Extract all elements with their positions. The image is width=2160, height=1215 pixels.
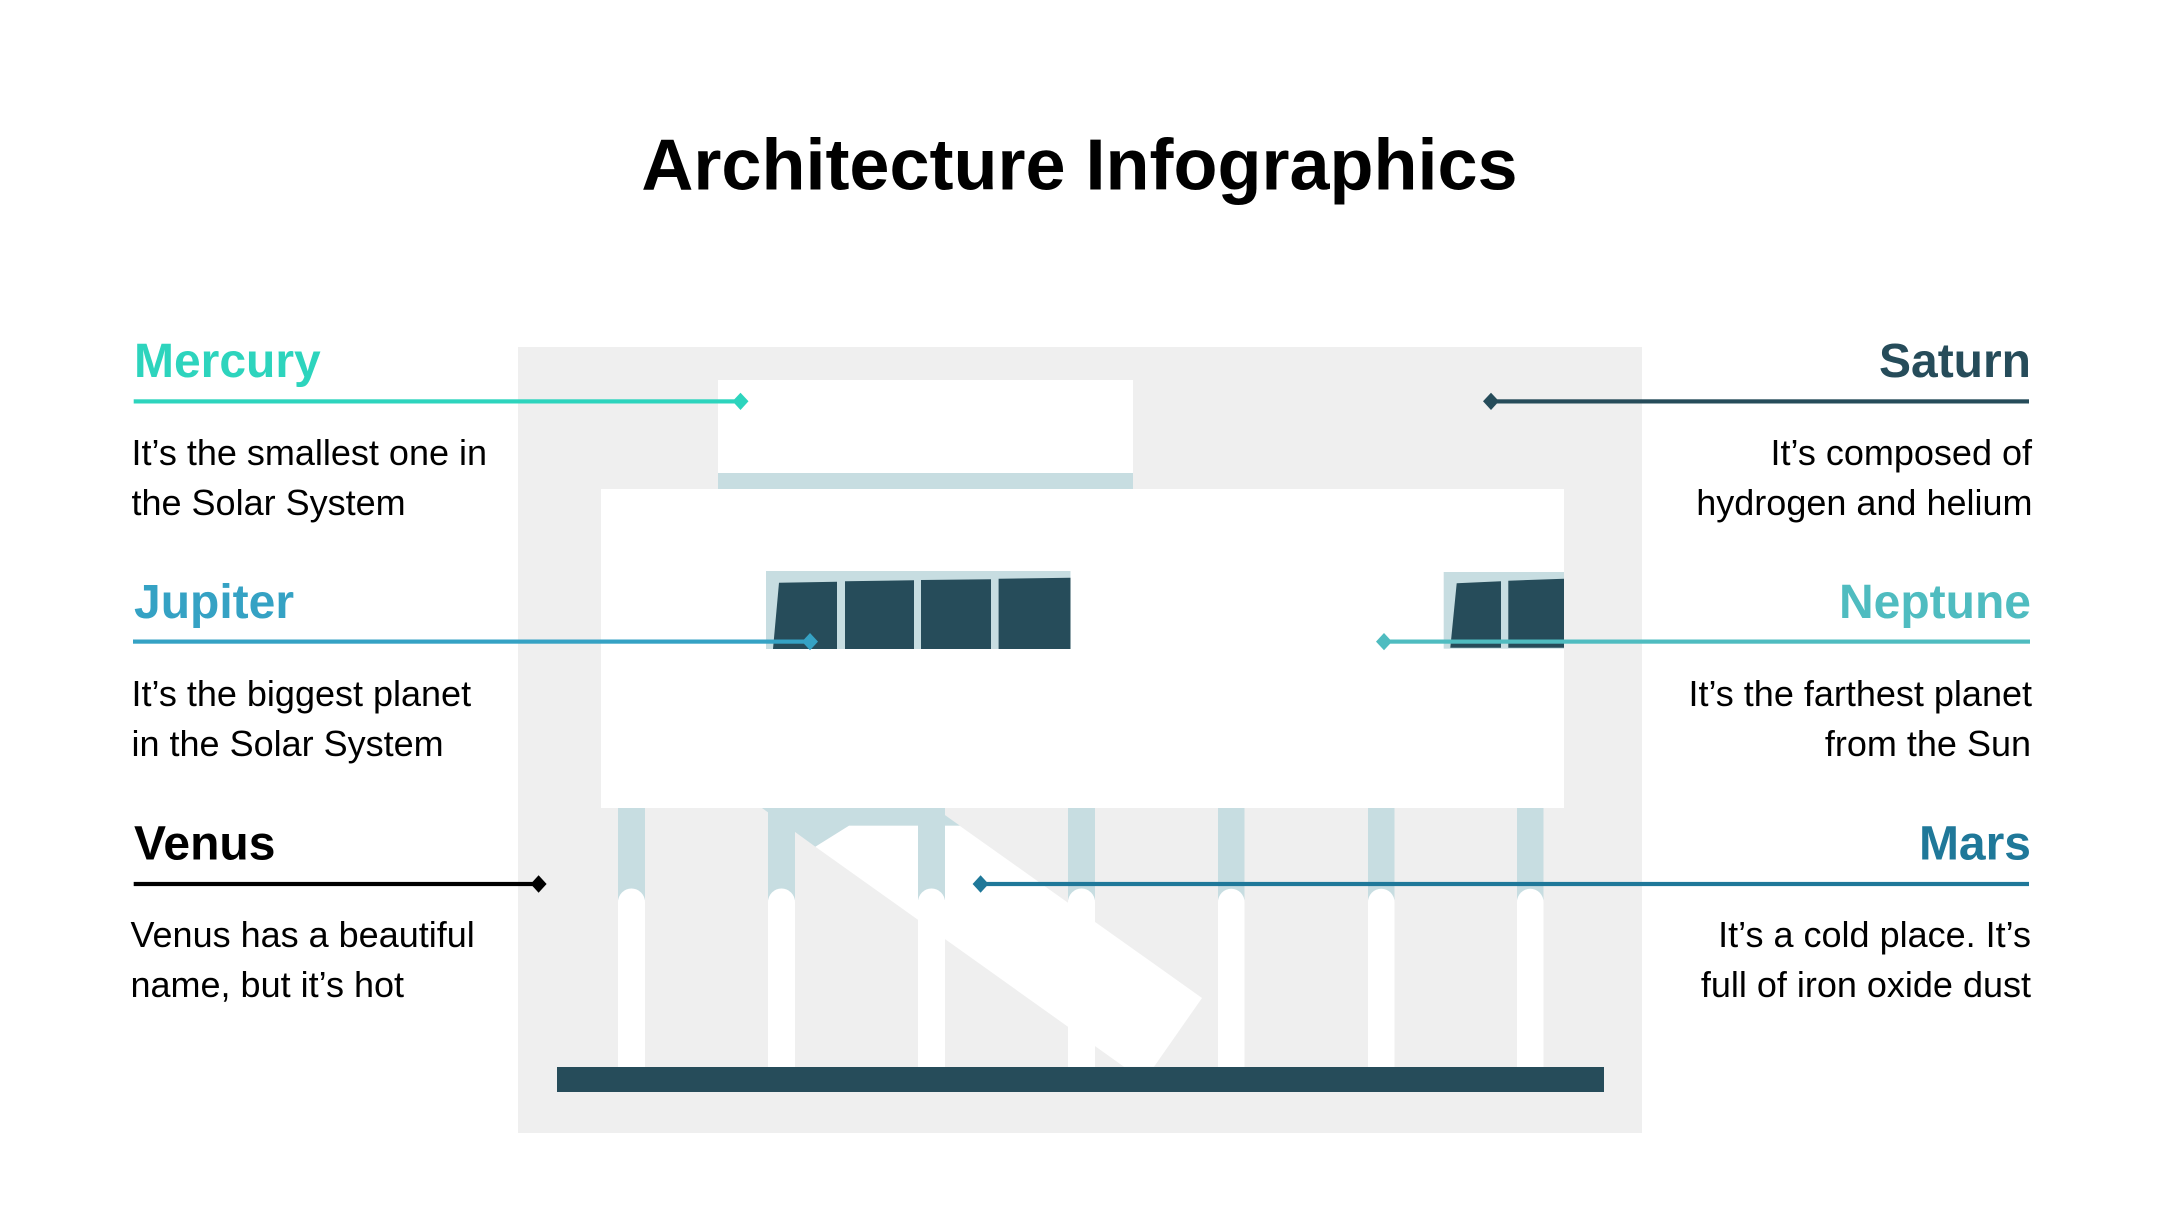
callout: Jupiter: in the Solar System (132, 723, 444, 764)
upper storey (718, 380, 1133, 489)
callout: Neptune: It’s the farthest planet (1688, 673, 2032, 714)
ground slab (557, 1067, 1604, 1092)
callout: Jupiter: It’s the biggest planet (132, 673, 471, 714)
callout: Venus: name, but it’s hot (130, 964, 404, 1005)
diagonal staircase (815, 826, 1202, 1067)
callout: Venus: Venus has a beautiful (130, 914, 475, 955)
background panel (518, 347, 1642, 1133)
callout: Jupiter (132, 576, 818, 764)
callout: Mercury (132, 335, 748, 523)
callout: Mercury: the Solar System (132, 482, 406, 523)
callout: Venus (130, 818, 547, 1005)
callout: Neptune: from the Sun (1825, 723, 2031, 764)
callout: Saturn: It’s composed of (1771, 432, 2033, 473)
callout: Neptune: Neptune (1839, 576, 2031, 629)
callout: Jupiter: Jupiter (134, 576, 294, 629)
staircase shadow (762, 808, 960, 847)
callout: Mars: It’s a cold place. It’s (1718, 914, 2031, 955)
panel: building illustration (518, 347, 1642, 1133)
callout: Venus: Venus (134, 818, 275, 870)
window: right (1444, 572, 1564, 649)
callout: Saturn (1483, 335, 2033, 523)
columns (618, 808, 1544, 1067)
callout: Saturn: Saturn (1879, 335, 2031, 388)
main white volume (601, 489, 1564, 808)
callout: Mercury: It’s the smallest one in (132, 432, 487, 473)
callout: Saturn: hydrogen and helium (1696, 482, 2032, 523)
callout: Neptune (1376, 576, 2032, 764)
window: centre (766, 571, 1070, 649)
callout: Mars (973, 818, 2031, 1005)
callout: Mars: Mars (1919, 818, 2031, 870)
callout: Mars: full of iron oxide dust (1701, 964, 2031, 1005)
callout: Mercury: Mercury (134, 335, 321, 388)
title: Architecture Infographics (641, 126, 1518, 206)
